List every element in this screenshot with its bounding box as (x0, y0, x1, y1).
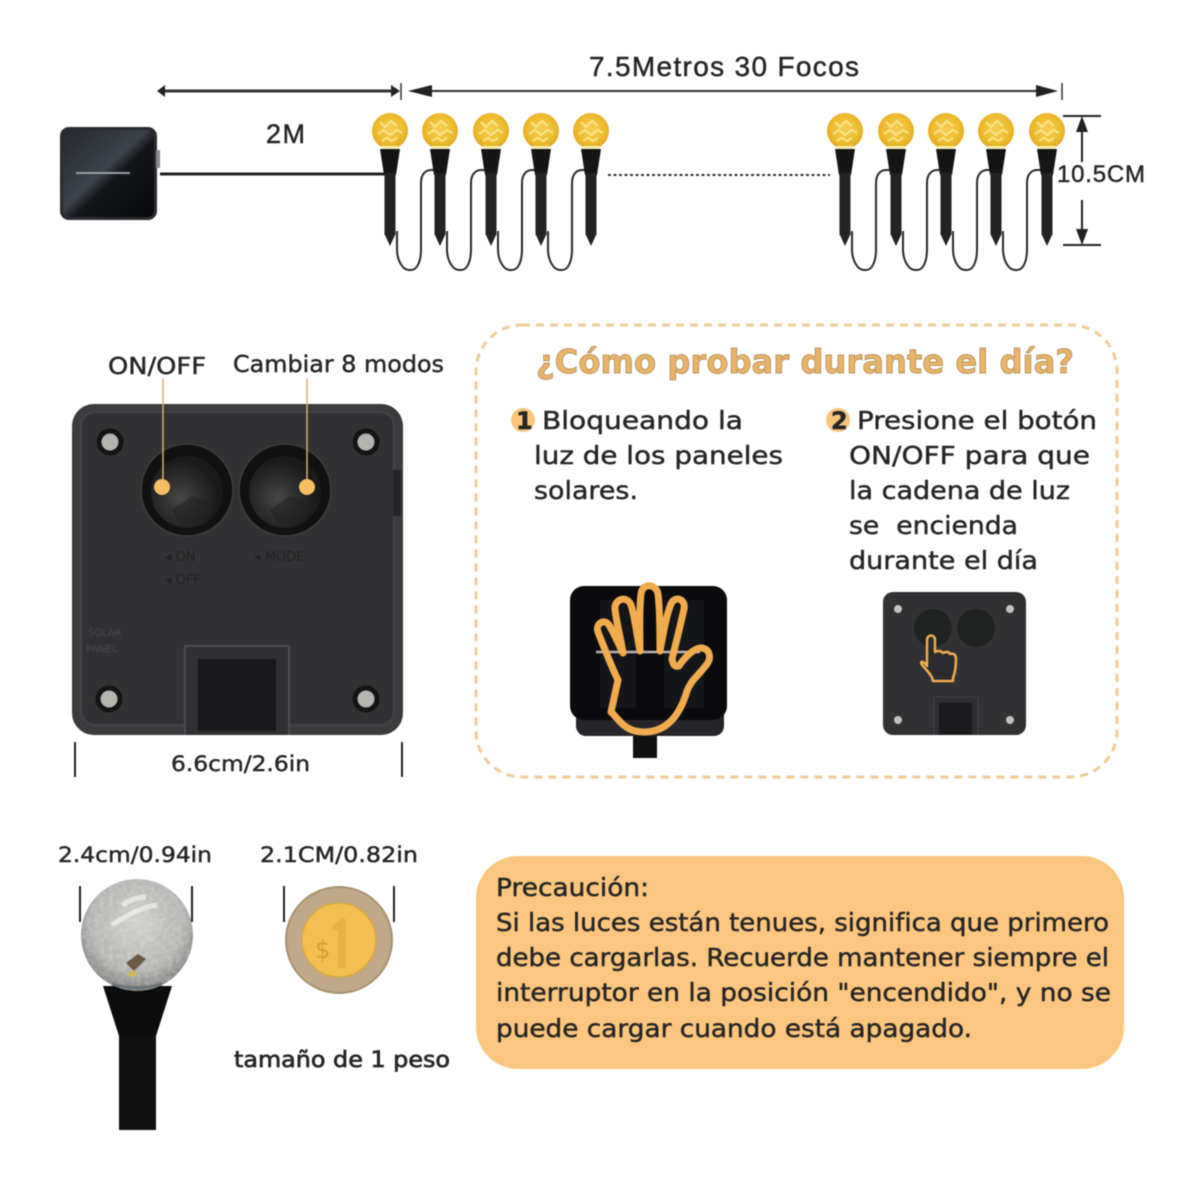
dimension arrow: stake height (1063, 116, 1101, 245)
step 2 text: se encienda (849, 511, 1018, 540)
icon: solar panel (60, 127, 160, 220)
dimension arrow: 2M cable length (157, 85, 400, 97)
embossed labels: ◂ OFF (165, 573, 201, 588)
step 2 text: Presione el botón (857, 406, 1097, 435)
panel: caution: Precaución: (496, 873, 649, 902)
label: change modes: Cambiar 8 modos (233, 352, 444, 378)
heading: ¿Cómo probar durante el día? (536, 342, 1074, 381)
embossed labels: ◂ MODE (254, 550, 304, 565)
step 1 text: luz de los paneles (534, 441, 783, 470)
panel: caution: Si las luces están tenues, significa que primero (496, 908, 1109, 937)
step 2 text (826, 406, 1097, 575)
step 2 text: 2 (831, 407, 848, 435)
label: coin size: tamaño de 1 peso (234, 1048, 450, 1073)
divider tick at start of lights (400, 83, 402, 100)
step 1 text: Bloqueando la (542, 406, 743, 435)
label: on/off: ON/OFF (108, 354, 206, 380)
illustration: one peso coin (286, 887, 392, 993)
step 1 text: solares. (534, 476, 638, 505)
illustration: hand covering solar panel (570, 586, 727, 758)
label: cable length: 2M (266, 119, 305, 149)
panel: caution: puede cargar cuando está apagado. (496, 1014, 972, 1043)
icon: screws (98, 431, 377, 710)
illustration: close-up bulb (81, 879, 193, 1130)
embossed labels: ◂ ON (165, 550, 196, 565)
dotted continuation line (608, 174, 830, 176)
step 2 text: ON/OFF para que (849, 441, 1090, 470)
label: box width: 6.6cm/2.6in (171, 752, 310, 776)
step 2 text: la cadena de luz (849, 476, 1070, 505)
connector port (185, 646, 289, 735)
width marker ticks (75, 742, 402, 777)
coin width ticks (284, 886, 394, 922)
bulb width ticks (80, 886, 192, 922)
leader line and dot: mode (299, 378, 315, 495)
embossed labels (86, 550, 304, 655)
button: mode (239, 444, 331, 536)
cable from solar panel (160, 172, 385, 176)
panel: caution: interruptor en la posición "encendido", y no se (496, 978, 1111, 1007)
step 2 text: durante el día (849, 546, 1038, 575)
control box back (72, 404, 403, 735)
step 1 text (511, 406, 783, 505)
dimension arrow: 7.5 metres (408, 83, 1062, 100)
step 1 text: 1 (516, 407, 533, 435)
panel: caution: debe cargarlas. Recuerde mantener siempre el (496, 943, 1109, 972)
light string: first five stakes (372, 113, 609, 270)
embossed labels: PANEL (86, 644, 118, 655)
embossed labels: SOLAR (88, 628, 122, 639)
illustration: one peso coin: $ (315, 936, 330, 964)
label: string length: 7.5Metros 30 Focos (589, 51, 859, 82)
illustration: finger pressing on/off button (883, 592, 1026, 735)
button: on/off (141, 444, 233, 536)
light string: last five stakes (827, 113, 1065, 270)
label: bulb diameter: 2.4cm/0.94in (58, 843, 212, 867)
label: coin diameter: 2.1CM/0.82in (260, 843, 418, 867)
leader line and dot: on/off (154, 378, 170, 495)
panel: how to test during the day (476, 325, 1117, 777)
label: stake height: 10.5CM (1057, 161, 1145, 188)
panel: caution (476, 856, 1124, 1069)
